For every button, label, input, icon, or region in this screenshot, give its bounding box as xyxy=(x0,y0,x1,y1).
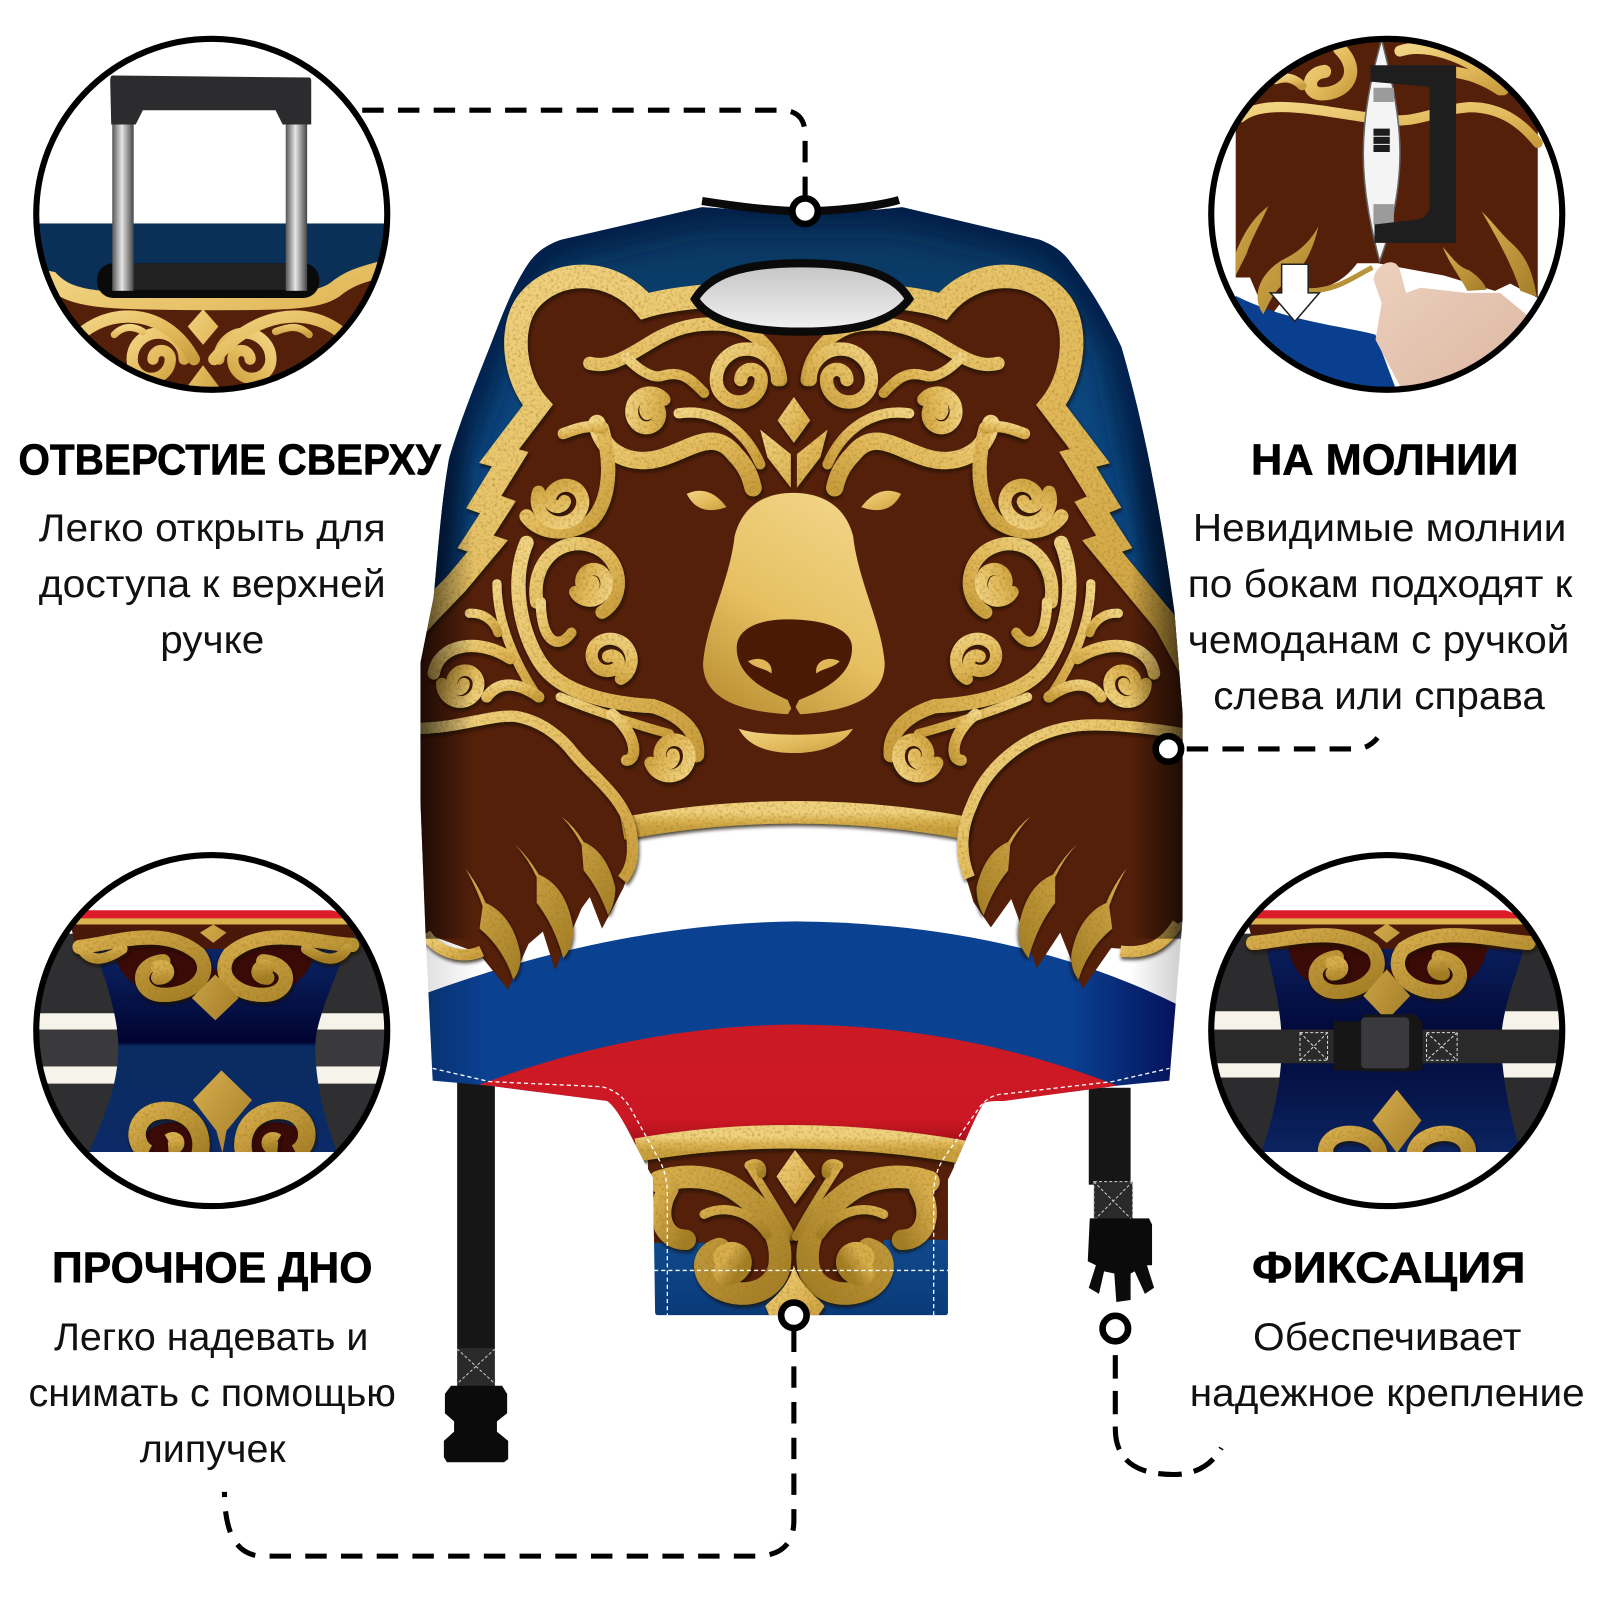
upper ornament xyxy=(1253,935,1529,992)
description: по бокам подходят к xyxy=(1188,563,1574,606)
head ornaments left xyxy=(434,324,781,782)
red strip xyxy=(1253,910,1522,920)
suitcase sides dark xyxy=(31,934,393,1152)
connector: buckle xyxy=(1115,1355,1221,1474)
heading: ОТВЕРСТИЕ СВЕРХУ xyxy=(18,435,441,484)
point marker: buckle xyxy=(1103,1316,1128,1341)
point marker: top xyxy=(792,198,818,224)
suitcase zip strip xyxy=(31,1030,393,1066)
bear nose xyxy=(737,619,852,712)
dark interior behind scrolls xyxy=(1288,941,1488,991)
neck band xyxy=(702,200,899,211)
upper diamonds xyxy=(1363,923,1410,1020)
heading: ФИКСАЦИЯ xyxy=(1252,1244,1526,1293)
bear mouth xyxy=(739,729,853,753)
paw gold outlines xyxy=(413,716,1189,955)
lower ornament xyxy=(137,1110,307,1158)
blue band xyxy=(1224,296,1400,400)
lower ornament xyxy=(1326,1133,1468,1163)
point marker: side xyxy=(1156,736,1181,762)
bear gold outline: head and ears xyxy=(408,276,1196,679)
suitcase white stripes xyxy=(1204,1011,1571,1078)
description: слева или справа xyxy=(1213,675,1545,718)
forehead lozenge xyxy=(760,397,828,488)
inset ring xyxy=(1211,39,1562,390)
lock metal blocks xyxy=(1373,88,1394,224)
brown under strip xyxy=(69,920,357,949)
bottom panel blue xyxy=(648,1224,954,1321)
strap xyxy=(1204,1030,1566,1063)
description xyxy=(39,507,386,662)
strap stitching xyxy=(1300,1033,1457,1060)
claws right xyxy=(977,816,1127,980)
lock dials xyxy=(1373,129,1390,152)
brown area with gold edge xyxy=(48,262,378,386)
inset ornament xyxy=(84,316,340,378)
clip white bottom xyxy=(1204,1152,1566,1213)
gold bar above flag xyxy=(622,812,969,829)
brown fabric xyxy=(1236,31,1538,316)
connector: top opening xyxy=(362,110,805,199)
inset diamonds xyxy=(188,310,219,387)
background edge glow xyxy=(420,207,1183,816)
description: Обеспечивает xyxy=(1253,1316,1522,1359)
telescopic tubes xyxy=(112,122,134,291)
description: ручке xyxy=(160,619,264,662)
lower diamond xyxy=(193,1070,252,1153)
inset ring xyxy=(36,39,387,390)
luggage cover with bear print xyxy=(408,194,1204,1321)
flag band: white xyxy=(408,796,1204,1041)
heading: ПРОЧНОЕ ДНО xyxy=(52,1244,372,1293)
circle inset: zipper xyxy=(1211,31,1562,400)
dark interior behind scrolls xyxy=(112,942,316,993)
gold strip xyxy=(1251,918,1532,924)
claws xyxy=(1236,206,1537,314)
white arrow xyxy=(1270,264,1319,321)
connector: side zipper xyxy=(1187,738,1378,749)
bottom panel brown xyxy=(648,1135,954,1284)
bottom ornament right xyxy=(796,1164,929,1294)
description xyxy=(1190,1316,1585,1415)
flag band: red xyxy=(471,1024,1128,1153)
heading: НА МОЛНИИ xyxy=(1251,435,1518,484)
block: bottom xyxy=(29,1244,396,1471)
bottom ornament diamond and fleur xyxy=(765,1150,824,1318)
point marker: bottom xyxy=(781,1303,807,1328)
description: доступа к верхней xyxy=(39,563,386,606)
slot xyxy=(97,263,319,298)
head ornaments right xyxy=(807,324,1154,782)
bear silhouette brown xyxy=(413,276,1194,990)
clip white bottom xyxy=(31,1152,393,1213)
description: липучек xyxy=(140,1428,287,1471)
upper diamonds xyxy=(192,924,239,1020)
description: снимать с помощью xyxy=(29,1372,396,1415)
red strip xyxy=(77,910,347,920)
navy cover xyxy=(40,223,384,291)
bottom gold bar xyxy=(637,1137,963,1152)
suitcase white stripes xyxy=(31,1013,393,1084)
block: fixing xyxy=(1190,1244,1585,1415)
buckle center xyxy=(1361,1017,1409,1068)
circle inset: top opening xyxy=(31,39,393,398)
cover side shading xyxy=(420,412,1183,939)
buckle xyxy=(1334,1014,1422,1071)
cover background xyxy=(408,194,1204,806)
claws left xyxy=(465,816,615,980)
handle opening xyxy=(695,263,909,332)
lock body xyxy=(1363,40,1400,261)
brown under strip xyxy=(1247,920,1536,949)
bear eyes xyxy=(687,491,901,510)
description: чемоданам с ручкой xyxy=(1188,619,1569,662)
dark interior behind lower scrolls xyxy=(138,1122,311,1153)
bear muzzle xyxy=(703,493,885,714)
gold strip xyxy=(73,918,354,924)
navy cover center xyxy=(1261,944,1526,1152)
bottom ornament left xyxy=(659,1164,792,1294)
right strap with buckle xyxy=(1088,1088,1154,1302)
description: Легко открыть для xyxy=(39,507,386,550)
suitcase sides dark xyxy=(1204,934,1566,1152)
description xyxy=(29,1316,396,1471)
block: zipper xyxy=(1188,435,1574,718)
left strap with buckle xyxy=(444,1082,508,1462)
inset ring xyxy=(36,855,387,1206)
lower diamond xyxy=(1372,1090,1421,1153)
navy cover center xyxy=(89,945,347,1152)
suitcase side handle xyxy=(1370,65,1456,243)
upper ornament xyxy=(80,937,352,995)
description: надежное крепление xyxy=(1190,1372,1585,1415)
circle inset: bottom xyxy=(31,855,393,1213)
seam stitching xyxy=(433,1068,1169,1315)
gold lines and ornament xyxy=(1241,48,1538,143)
flag band: blue xyxy=(413,921,1189,1092)
description: Легко надевать и xyxy=(54,1316,368,1359)
circle inset: fixing strap xyxy=(1204,855,1571,1213)
connector: bottom xyxy=(224,1331,794,1556)
gold arc under paw xyxy=(1308,267,1372,291)
block: top opening xyxy=(18,435,441,662)
inset ring xyxy=(1211,855,1562,1206)
handle grip xyxy=(110,76,311,124)
hand xyxy=(1373,262,1529,392)
description: Невидимые молнии xyxy=(1193,507,1566,550)
description xyxy=(1188,507,1574,718)
